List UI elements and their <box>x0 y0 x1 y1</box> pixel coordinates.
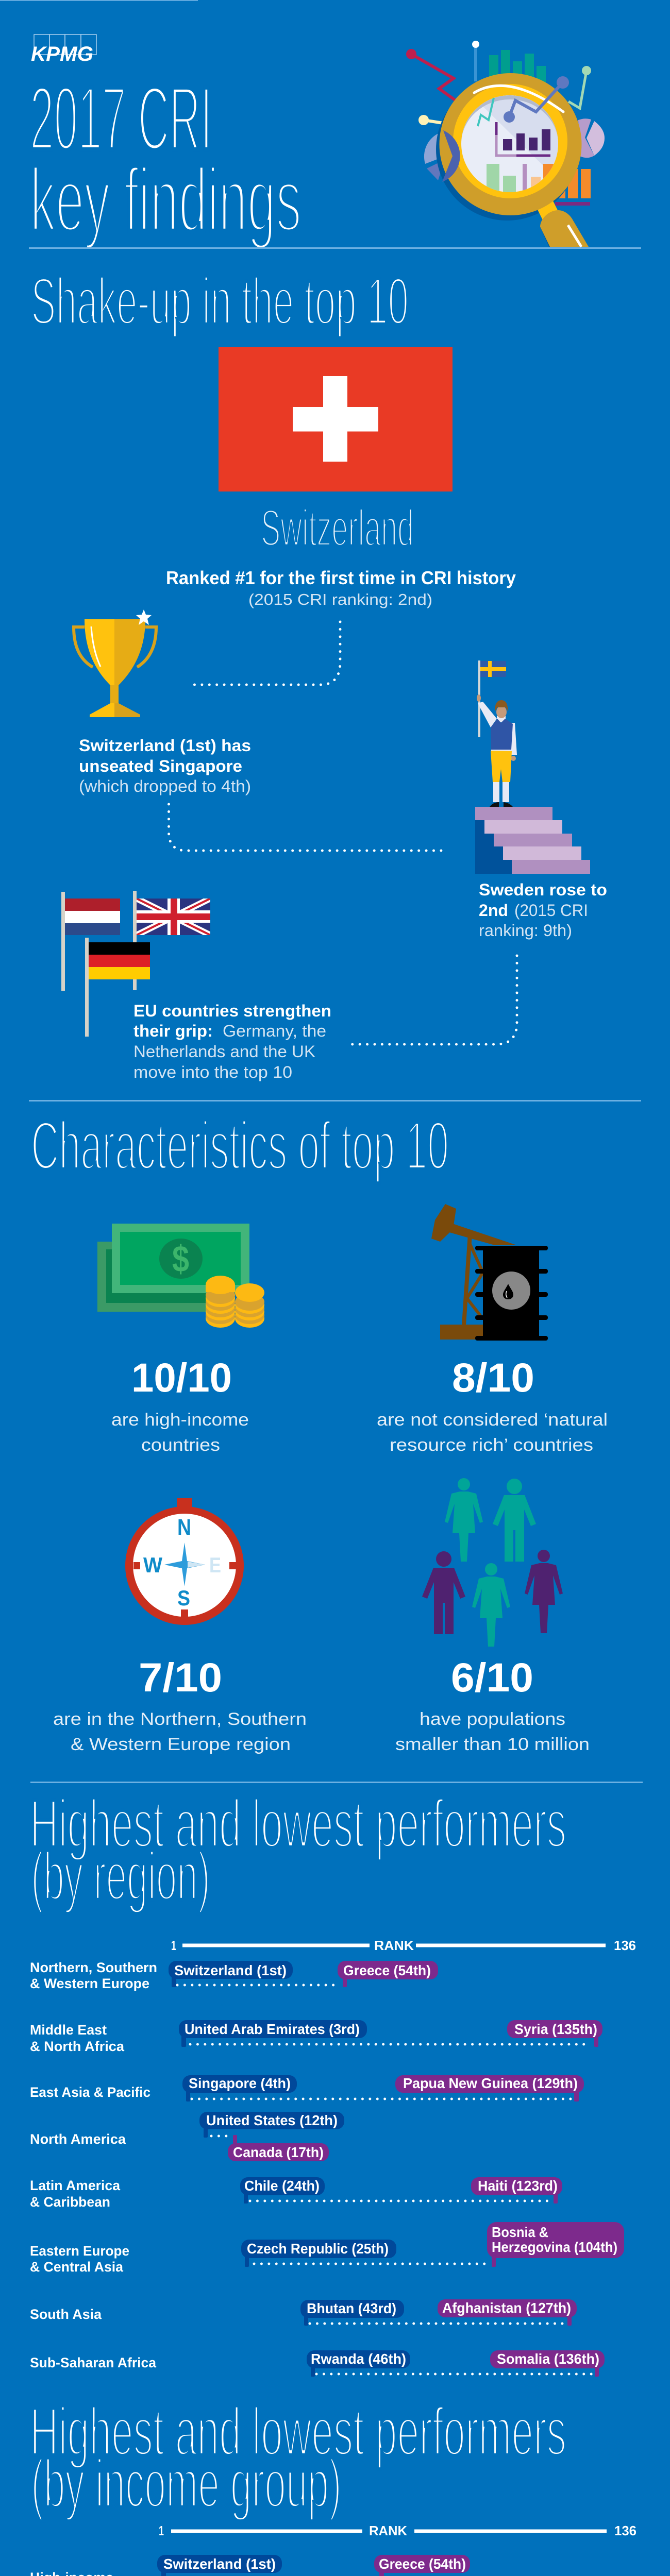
axis: rank 1 to 136 <box>171 1938 636 1953</box>
stat: 6 of 10 small population: smaller than 10 million <box>395 1735 590 1754</box>
text: EU countries strengthen: EU countries strengthen <box>133 1002 331 1020</box>
axis: rank 1 to 136: RANK <box>369 2523 407 2538</box>
text: EU countries strengthen: Germany, the <box>223 1022 326 1040</box>
stat: 6 of 10 small population: have populations <box>420 1709 565 1729</box>
icon: group of people <box>422 1478 563 1647</box>
text: Switzerland unseated Singapore: Switzerland (1st) has <box>79 736 251 755</box>
heading: performers by region <box>30 1786 566 1914</box>
icon: oil pump and barrel <box>431 1204 548 1341</box>
person: purple woman <box>525 1550 563 1633</box>
axis: rank 1 to 136 <box>159 2523 636 2538</box>
row: Sub-Saharan Africa: Rwanda (46th) <box>311 2351 406 2367</box>
illustration: magnifying glass over charts <box>406 41 605 247</box>
row: Northern, Southern and Western Europe: Switzerland (1st) <box>174 1962 287 1978</box>
heading: performers by income group: (by income group) <box>31 2446 342 2521</box>
row: East Asia and Pacific: Papua New Guinea (129th) <box>403 2075 578 2091</box>
row: Northern, Southern and Western Europe: Northern, Southern <box>30 1960 157 1975</box>
heading: performers by region: (by region) <box>31 1838 210 1914</box>
stat: 8 of 10 not resource rich: are not considered ‘natural <box>377 1410 608 1430</box>
row: Latin America and Caribbean: Haiti (123rd) <box>478 2178 558 2194</box>
person: teal woman <box>445 1478 483 1562</box>
row: High-income: Switzerland (1st) <box>163 2556 276 2572</box>
text: Sweden rose <box>479 880 607 940</box>
row: East Asia and Pacific <box>30 2075 584 2102</box>
lens contents <box>442 76 569 196</box>
icon: banknotes and coins: $ <box>172 1239 189 1280</box>
stat: 8 of 10 not resource rich <box>377 1354 608 1455</box>
text: Sweden rose: ranking: 9th) <box>479 921 572 940</box>
row: Northern, Southern and Western Europe <box>30 1960 438 1991</box>
stat: 6 of 10 small population: 6/10 <box>451 1654 533 1700</box>
magnifier body <box>436 73 589 247</box>
text: ranked number 1: (2015 CRI ranking: 2nd) <box>248 590 432 608</box>
divider <box>29 247 641 249</box>
logo: KPMG <box>31 35 96 65</box>
row: South Asia: South Asia <box>30 2307 102 2322</box>
text: Switzerland unseated Singapore: unseated Singapore <box>79 757 242 775</box>
row: South Asia: Afghanistan (127th) <box>442 2300 571 2316</box>
person: purple man <box>422 1551 465 1634</box>
row: Northern, Southern and Western Europe: Greece (54th) <box>343 1962 431 1978</box>
text: EU countries strengthen: move into the top 10 <box>133 1063 292 1081</box>
person: teal woman front <box>472 1563 510 1647</box>
connector: Singapore text to stairs <box>169 804 444 851</box>
coins <box>206 1276 264 1328</box>
row: South Asia <box>30 2299 577 2326</box>
axis: rank 1 to 136: RANK <box>374 1938 414 1953</box>
row: Eastern Europe and Central Asia: Herzegovina (104th) <box>492 2239 617 2255</box>
icon: compass: E <box>209 1553 221 1577</box>
row: Eastern Europe and Central Asia: Eastern Europe <box>30 2243 129 2259</box>
text: EU countries strengthen <box>133 1002 331 1081</box>
text: EU countries strengthen: Netherlands and the UK <box>133 1042 315 1061</box>
flag: Germany <box>85 938 150 1037</box>
text: EU countries strengthen: their grip: <box>133 1022 213 1040</box>
connector: Sweden text to EU text <box>350 956 517 1044</box>
flag: Netherlands <box>61 892 120 991</box>
stat: 7 of 10 in Europe: & Western Europe region <box>71 1735 291 1754</box>
row: Middle East and North Africa <box>30 2020 602 2054</box>
icon: person with Swedish flag <box>477 660 517 807</box>
stat: 8 of 10 not resource rich: resource rich’ countries <box>390 1435 593 1455</box>
chart: rank by income group <box>30 2523 636 2576</box>
stat: 6 of 10 small population <box>395 1654 590 1754</box>
row: Sub-Saharan Africa: Somalia (136th) <box>497 2351 599 2367</box>
icon: compass: S <box>177 1586 190 1610</box>
row: Eastern Europe and Central Asia <box>30 2222 624 2275</box>
row: East Asia and Pacific: Singapore (4th) <box>189 2075 291 2091</box>
row: High-income: Greece (54th) <box>379 2556 466 2572</box>
label: Switzerland: Switzerland <box>261 499 414 557</box>
text: ranked number 1 <box>166 567 516 608</box>
stat: 7 of 10 in Europe: are in the Northern, Southern <box>53 1709 307 1729</box>
row: Middle East and North Africa: United Arab Emirates (3rd) <box>185 2021 360 2037</box>
chart: rank by region <box>30 1938 636 2377</box>
row: Middle East and North Africa: Middle East <box>30 2022 107 2038</box>
stat: 10 of 10 high-income: are high-income <box>111 1410 249 1430</box>
stat: 8 of 10 not resource rich: 8/10 <box>452 1354 534 1400</box>
icon: compass <box>125 1498 244 1625</box>
row: Sub-Saharan Africa: Sub-Saharan Africa <box>30 2355 157 2370</box>
text: Sweden rose: Sweden rose to <box>479 880 607 899</box>
title: 2017 CRI <box>30 69 212 169</box>
row: Eastern Europe and Central Asia: & Central Asia <box>30 2259 124 2275</box>
logo: KPMG: KPMG <box>31 43 93 65</box>
title <box>30 69 301 250</box>
icon: banknotes and coins <box>97 1224 264 1328</box>
text: Switzerland unseated Singapore <box>79 736 251 795</box>
axis: rank 1 to 136: 136 <box>614 2523 636 2538</box>
axis: rank 1 to 136: 1 <box>171 1938 176 1953</box>
flag: Switzerland <box>219 347 453 492</box>
chart lines behind the magnifier <box>406 41 605 206</box>
row: North America <box>30 2112 344 2161</box>
title: key findings <box>30 150 301 250</box>
row: Middle East and North Africa: Syria (135th) <box>514 2021 597 2037</box>
stat: 10 of 10 high-income <box>111 1354 249 1455</box>
stat: 10 of 10 high-income: countries <box>141 1435 220 1455</box>
row: Latin America and Caribbean: Latin America <box>30 2178 121 2193</box>
heading: performers by income group <box>30 2394 566 2521</box>
divider <box>29 1100 641 1101</box>
row: Eastern Europe and Central Asia: Czech Republic (25th) <box>247 2241 389 2257</box>
row: Latin America and Caribbean <box>30 2177 562 2210</box>
row: North America: North America <box>30 2131 126 2147</box>
axis: rank 1 to 136: 136 <box>614 1938 636 1953</box>
row: Middle East and North Africa: & North Africa <box>30 2039 125 2054</box>
connector: top text to trophy <box>190 622 340 685</box>
person: teal man <box>493 1479 536 1562</box>
row: South Asia: Bhutan (43rd) <box>307 2300 396 2316</box>
stat: 7 of 10 in Europe: 7/10 <box>139 1654 222 1700</box>
text: Sweden rose: (2015 CRI <box>514 901 588 920</box>
row: Latin America and Caribbean: Chile (24th) <box>244 2178 320 2194</box>
flag: United Kingdom <box>133 891 210 990</box>
text: Switzerland unseated Singapore: (which dropped to 4th) <box>79 777 251 795</box>
row: North America: Canada (17th) <box>233 2144 324 2160</box>
text: Sweden rose: 2nd <box>479 901 508 920</box>
icon: trophy <box>74 609 156 717</box>
row: Northern, Southern and Western Europe: & Western Europe <box>30 1976 149 1991</box>
axis: rank 1 to 136: 1 <box>159 2523 164 2538</box>
text: ranked number 1: Ranked #1 for the first time in CRI history <box>166 567 516 588</box>
icon: stairs <box>475 807 590 874</box>
row: East Asia and Pacific: East Asia & Pacific <box>30 2084 150 2100</box>
stat: 7 of 10 in Europe <box>53 1654 307 1754</box>
divider <box>30 1782 643 1783</box>
icon: compass: N <box>177 1515 191 1540</box>
icon: compass: W <box>143 1553 162 1577</box>
row: High-income <box>30 2555 470 2576</box>
row: Sub-Saharan Africa <box>30 2350 605 2377</box>
row: Latin America and Caribbean: & Caribbean <box>30 2194 110 2210</box>
icon: flags of Netherlands, UK and Germany <box>61 891 210 1037</box>
row: North America: United States (12th) <box>206 2112 338 2128</box>
stat: 10 of 10 high-income: 10/10 <box>131 1354 232 1400</box>
row: Eastern Europe and Central Asia: Bosnia & <box>492 2224 548 2240</box>
